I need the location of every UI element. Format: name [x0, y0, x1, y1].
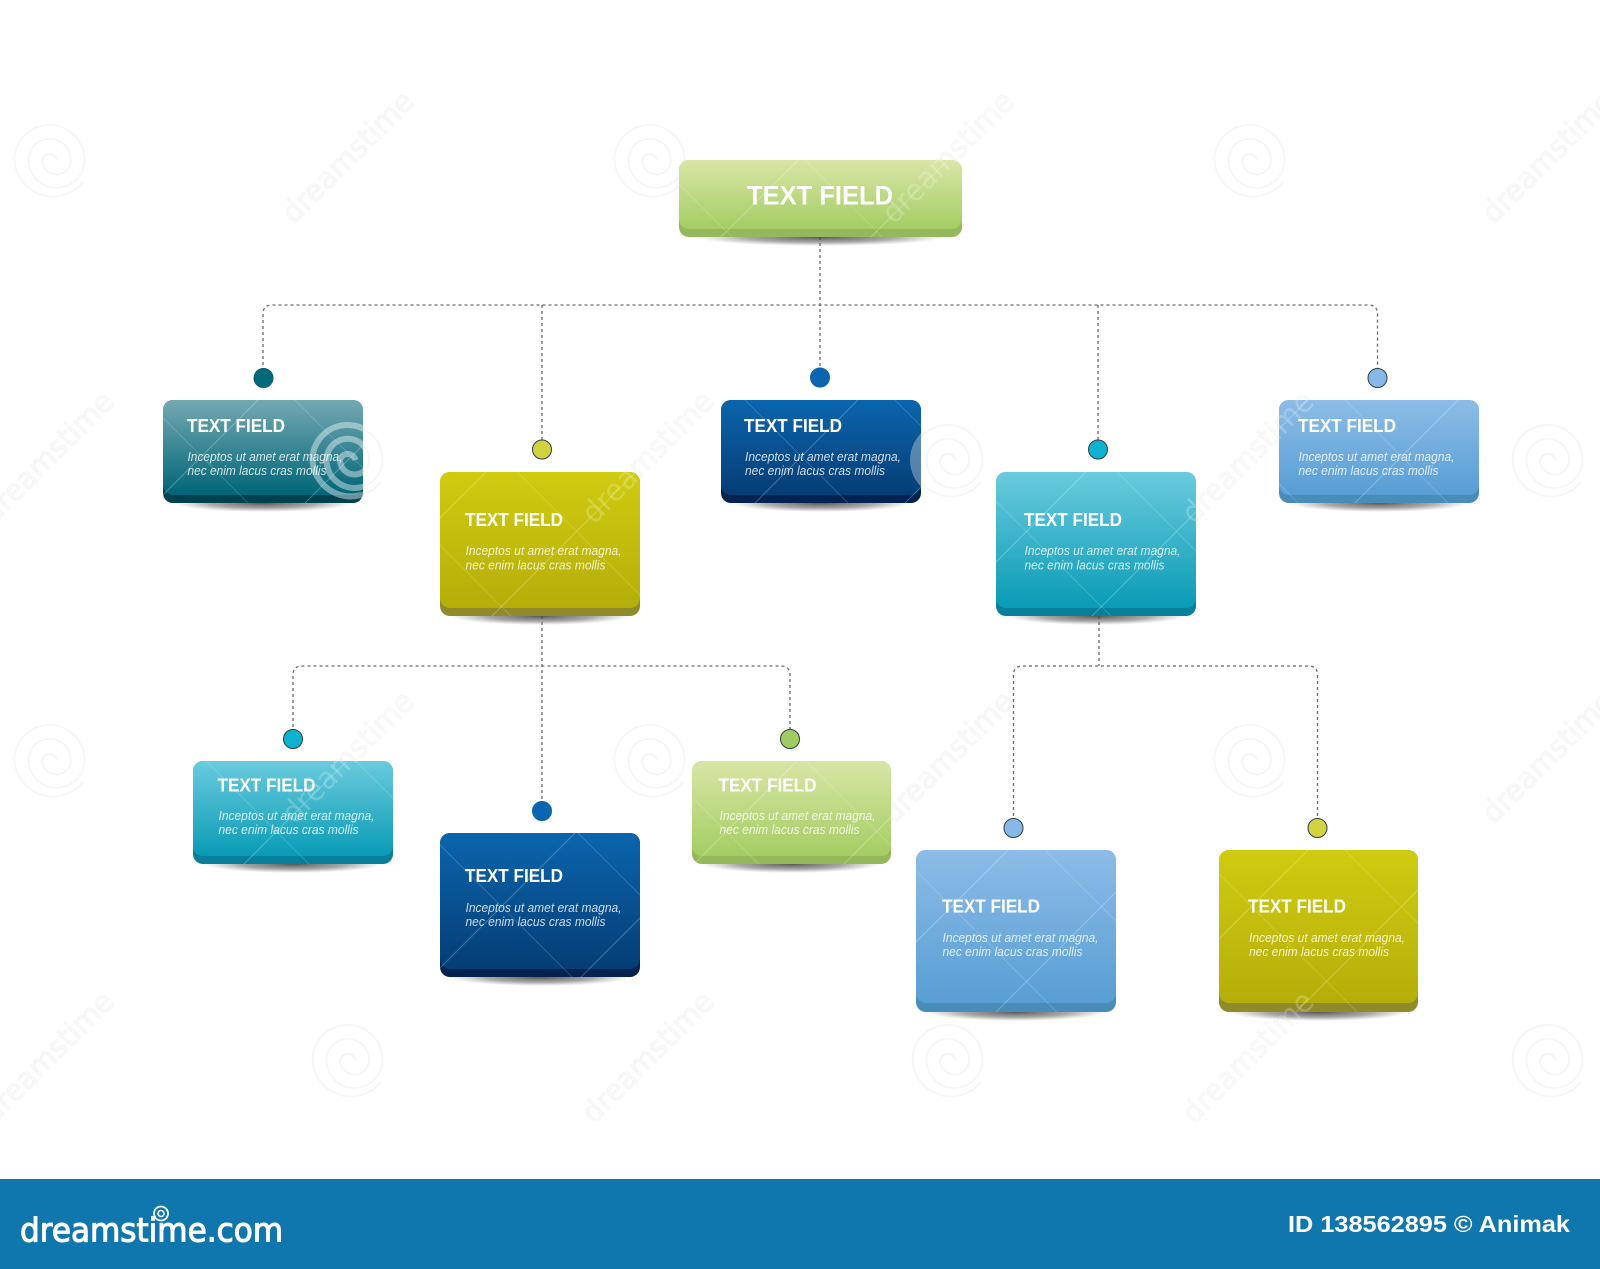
node: child green box: TEXT FIELD	[718, 774, 816, 796]
watermark: diagonal wordmarks: dreamstime	[575, 984, 721, 1131]
node: cyan box: nec enim lacus cras mollis	[1024, 558, 1165, 572]
watermark overlay on boxes: dreamstime	[275, 684, 421, 831]
node: cyan box	[996, 472, 1196, 625]
node: root box	[679, 160, 962, 246]
dot: olive	[532, 440, 552, 459]
node: child light blue box: TEXT FIELD	[942, 896, 1040, 916]
dot: child cyan	[284, 730, 302, 748]
watermark: spirals	[14, 125, 1582, 1096]
node: child light blue box: Inceptos ut amet erat magna,	[942, 931, 1098, 945]
node: child blue box: Inceptos ut amet erat magna,	[466, 901, 622, 915]
node: child olive box	[1219, 850, 1418, 1021]
node: olive box	[440, 472, 640, 625]
node: teal box: TEXT FIELD	[187, 415, 285, 436]
node: cyan box: Inceptos ut amet erat magna,	[1024, 544, 1180, 558]
dot: child olive	[1308, 818, 1327, 838]
node: blue box: nec enim lacus cras mollis	[745, 464, 886, 478]
node: light blue box: Inceptos ut amet erat magna,	[1298, 450, 1454, 464]
node: blue box: TEXT FIELD	[744, 415, 842, 436]
watermark: diagonal wordmarks: dreamstime	[875, 84, 1021, 231]
watermark overlay on boxes: dreamstime	[1175, 984, 1321, 1131]
node: child light blue box	[916, 850, 1116, 1021]
node: child green box: Inceptos ut amet erat magna,	[720, 809, 876, 823]
watermark overlay on boxes	[163, 160, 1458, 1019]
node: olive box: Inceptos ut amet erat magna,	[466, 544, 622, 558]
dot: child green	[780, 730, 800, 748]
node: child blue box: TEXT FIELD	[465, 865, 563, 886]
dot: cyan	[1088, 440, 1108, 459]
dot: child blue	[532, 802, 552, 820]
dot: blue	[810, 368, 830, 387]
footer bar	[0, 1179, 1600, 1269]
watermark overlay on boxes: dreamstime	[875, 84, 1021, 231]
node: teal box	[163, 400, 363, 512]
footer credit: ID 138562895 © Animak	[1288, 1211, 1570, 1237]
node: child olive box: Inceptos ut amet erat magna,	[1249, 931, 1405, 945]
dot: teal	[254, 368, 273, 388]
node: child blue box: nec enim lacus cras mollis	[466, 915, 606, 929]
dot: child light blue	[1004, 818, 1023, 838]
node: child cyan box: Inceptos ut amet erat magna,	[218, 809, 374, 823]
node: teal box: Inceptos ut amet erat magna,	[188, 450, 342, 464]
footer logo: dreamstime.com	[20, 1210, 283, 1250]
node: child green box	[692, 761, 891, 873]
node: child cyan box	[193, 761, 393, 873]
node: child green box: nec enim lacus cras mollis	[720, 823, 860, 837]
node: child cyan box: TEXT FIELD	[218, 774, 316, 796]
node: root box: TEXT FIELD	[747, 180, 893, 210]
watermark: diagonal wordmarks: dreamstime	[1175, 384, 1321, 531]
node: child blue box	[440, 833, 640, 986]
watermark: diagonal wordmarks: dreamstime	[275, 84, 421, 231]
node: light blue box	[1279, 400, 1479, 512]
node: child olive box: TEXT FIELD	[1248, 896, 1346, 916]
connector lines	[263, 237, 1378, 828]
node: blue box: Inceptos ut amet erat magna,	[745, 450, 901, 464]
node: olive box: TEXT FIELD	[465, 509, 563, 530]
node: light blue box: TEXT FIELD	[1298, 415, 1396, 436]
watermark: diagonal wordmarks: dreamstime	[1175, 984, 1321, 1131]
dot: light blue	[1368, 368, 1387, 388]
watermark: diagonal wordmarks: dreamstime	[575, 384, 721, 531]
node: blue box	[721, 400, 921, 512]
watermark: diagonal wordmarks: dreamstime	[875, 684, 1021, 831]
node: olive box: nec enim lacus cras mollis	[466, 558, 606, 572]
node: child cyan box: nec enim lacus cras mollis	[218, 823, 359, 837]
node: child olive box: nec enim lacus cras mollis	[1249, 945, 1390, 959]
watermark overlay on boxes: dreamstime	[575, 384, 721, 531]
node: light blue box: nec enim lacus cras mollis	[1298, 464, 1439, 478]
node: cyan box: TEXT FIELD	[1024, 509, 1122, 530]
node: child light blue box: nec enim lacus cras mollis	[942, 945, 1083, 959]
watermark: diagonal wordmarks: dreamstime	[275, 684, 421, 831]
watermark overlay on boxes: dreamstime	[1175, 384, 1321, 531]
node: teal box: nec enim lacus cras mollis	[188, 464, 327, 478]
